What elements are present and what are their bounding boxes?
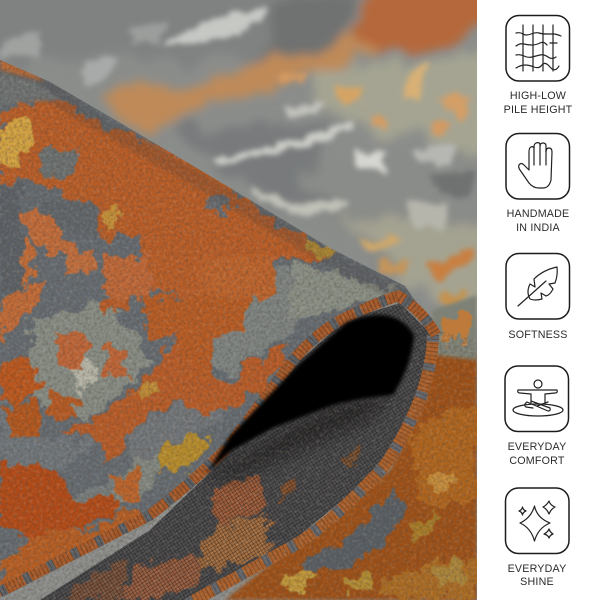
label: EVERYDAY	[508, 441, 566, 453]
icon: meditating figure	[505, 366, 568, 432]
blurred highlights	[0, 5, 475, 342]
label	[504, 90, 573, 116]
label: HIGH-LOW	[510, 90, 567, 102]
pile grain texture	[0, 50, 477, 600]
lighter grey pile	[0, 262, 400, 545]
grey holes inside orange	[0, 150, 232, 295]
yellow pile patches	[0, 120, 335, 472]
feature: everyday comfort	[505, 366, 568, 467]
rolled rug top face	[0, 50, 440, 600]
shaded edge on fuzzy ridge	[38, 79, 410, 296]
label: IN INDIA	[516, 222, 561, 234]
label: SOFTNESS	[508, 329, 568, 341]
label: PILE HEIGHT	[504, 104, 573, 116]
feature: high-low pile height	[504, 16, 573, 116]
label	[508, 563, 566, 588]
underside binding edge	[188, 335, 433, 600]
label: HANDMADE	[507, 208, 569, 220]
label: EVERYDAY	[508, 563, 566, 575]
back edge grey and orange	[0, 72, 60, 106]
feature: everyday shine	[506, 488, 569, 588]
white feature panel	[477, 0, 600, 600]
rug underside weave	[40, 300, 440, 600]
icon: pile height	[506, 16, 570, 81]
feature: softness	[506, 254, 570, 341]
blurred background rug	[0, 0, 477, 318]
label: SHINE	[520, 576, 554, 588]
feature: handmade in india	[506, 134, 570, 234]
orange pile patches	[0, 96, 335, 596]
label	[508, 441, 566, 467]
label: COMFORT	[509, 455, 565, 467]
label	[507, 208, 569, 234]
front binding edge	[0, 296, 436, 592]
floor rug lower right	[225, 295, 477, 600]
dark cavity inside the roll	[206, 315, 414, 474]
icon: sparkles	[506, 488, 569, 554]
icon: hand	[506, 134, 570, 199]
icon: feather	[506, 254, 570, 319]
